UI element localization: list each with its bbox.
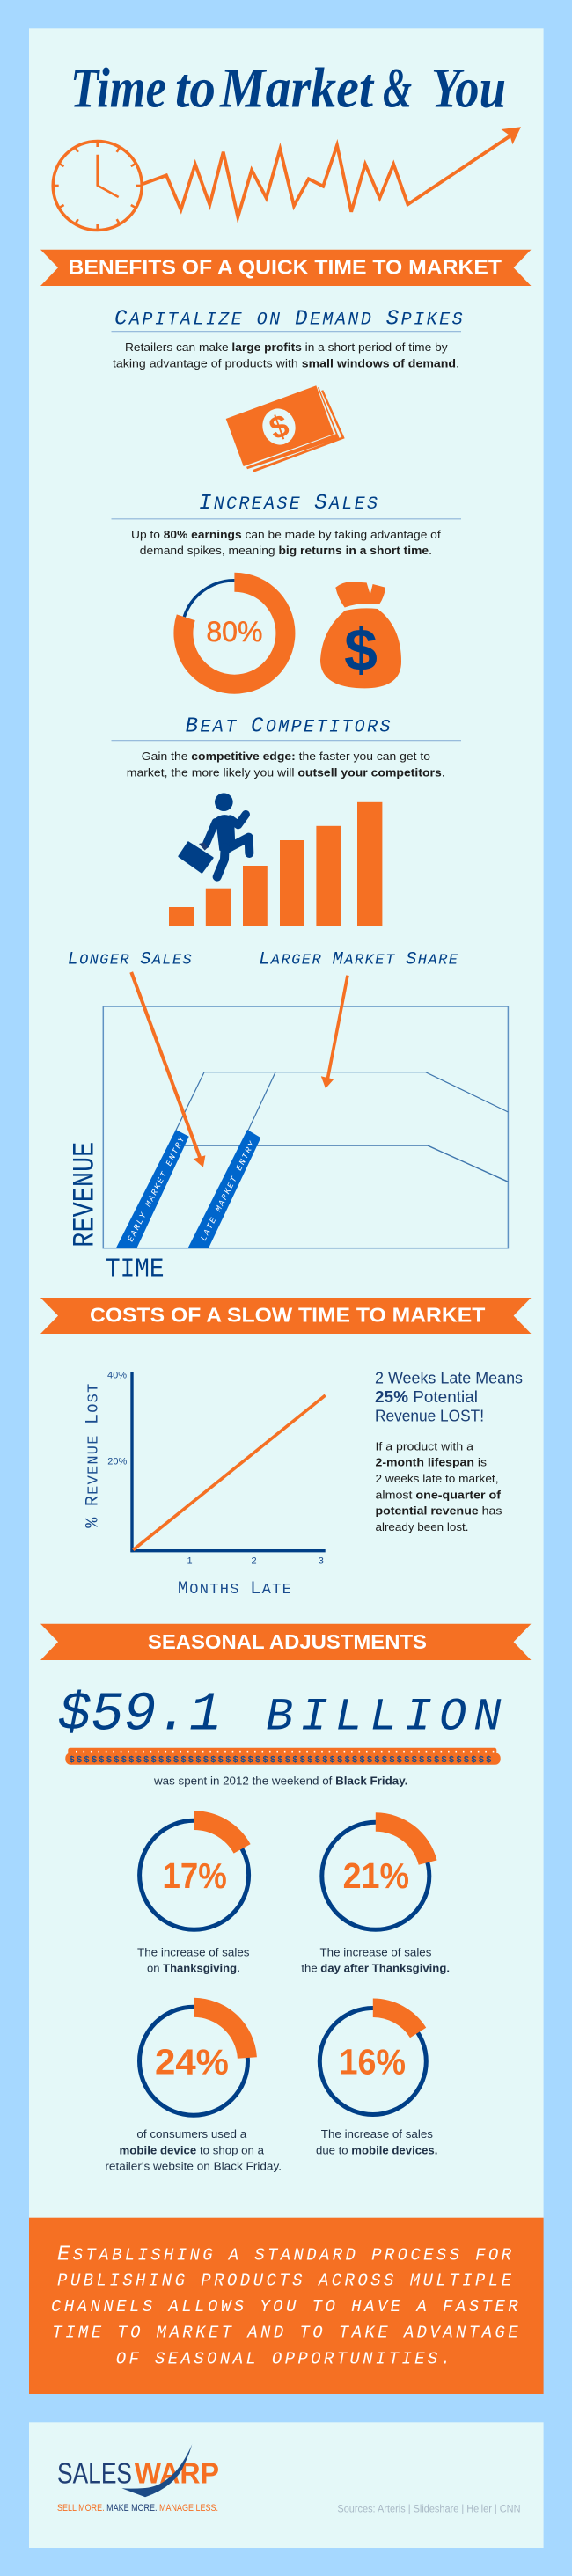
sources: Sources: Arteris | Slideshare | Heller | CNN bbox=[337, 2505, 521, 2515]
y axis label: % REVENUE LOST bbox=[84, 1384, 104, 1528]
axis label: revenue: REVENUE bbox=[70, 1142, 103, 1248]
callout body bbox=[375, 1439, 502, 1533]
banner: seasonal adjustments bbox=[40, 1624, 532, 1660]
caption: mobile device to shop on a bbox=[120, 2143, 265, 2156]
caption bbox=[137, 1945, 250, 1975]
caption bbox=[105, 2127, 282, 2173]
title: Time bbox=[70, 57, 166, 121]
caption: The increase of sales bbox=[137, 1945, 250, 1958]
icon: row of money bags bbox=[65, 1748, 501, 1765]
stat: 16%: 16% bbox=[340, 2041, 406, 2082]
callout body: If a product with a bbox=[375, 1439, 474, 1453]
caption: The increase of sales bbox=[320, 1945, 432, 1958]
body text: taking advantage of products with small windows of demand . bbox=[113, 356, 459, 370]
logo: saleswarp: SALES bbox=[57, 2457, 132, 2490]
arrow: longer sales bbox=[131, 972, 205, 1167]
chart: 80% donut: 80% bbox=[206, 616, 262, 648]
banner: benefits: BENEFITS OF A QUICK TIME TO MARKET bbox=[69, 256, 502, 279]
icon: clock bbox=[53, 141, 142, 231]
caption: retailer's website on Black Friday. bbox=[105, 2160, 282, 2173]
callout body: 2-month lifespan is bbox=[375, 1456, 488, 1469]
logo: saleswarp: SELL MORE. MAKE MORE. MANAGE LESS. bbox=[57, 2503, 218, 2514]
caption bbox=[316, 2127, 437, 2156]
conclusion text: TIME TO MARKET AND TO TAKE ADVANTAGE bbox=[52, 2324, 518, 2343]
icon: row of money bags: $$$$$$$$$$$$$$$$$$$$$$$$$$$$$$$$$$$$$$$$$$$$$$$$$$$$$$$$$ bbox=[70, 1754, 494, 1765]
x axis label: MONTHS LATE bbox=[178, 1579, 291, 1599]
body text bbox=[113, 340, 459, 370]
conclusion text: OF SEASONAL OPPORTUNITIES. bbox=[116, 2350, 451, 2369]
title bbox=[70, 57, 506, 121]
section: capitalize on demand spikes bbox=[111, 307, 463, 370]
callout heading bbox=[375, 1369, 523, 1425]
banner: costs bbox=[40, 1298, 532, 1334]
callout heading: 25% Potential bbox=[375, 1387, 478, 1406]
body text bbox=[131, 528, 441, 557]
chart: percent revenue lost by months late bbox=[84, 1371, 326, 1599]
heading: BEAT COMPETITORS bbox=[186, 714, 391, 739]
arrow: volatile line rising to the right bbox=[143, 127, 521, 217]
caption bbox=[301, 1945, 450, 1975]
body text: Up to 80% earnings can be made by taking advantage of bbox=[131, 528, 441, 541]
conclusion text bbox=[51, 2243, 518, 2369]
caption: The increase of sales bbox=[321, 2127, 433, 2141]
caption: the day after Thanksgiving. bbox=[301, 1962, 450, 1975]
panel: footer bbox=[29, 2422, 544, 2548]
heading: CAPITALIZE ON DEMAND SPIKES bbox=[114, 307, 463, 331]
icon: money bag: $ bbox=[344, 617, 378, 684]
x ticks: 1 bbox=[187, 1555, 193, 1566]
conclusion text: ESTABLISHING A STANDARD PROCESS FOR bbox=[57, 2243, 512, 2266]
big number: $59.1 billion: $59.1 bbox=[58, 1683, 222, 1745]
callout body: almost one-quarter of bbox=[375, 1488, 502, 1501]
body text: Gain the competitive edge: the faster you can get to bbox=[142, 750, 430, 763]
stat: 21% bbox=[301, 1812, 450, 1975]
y ticks: 20% bbox=[107, 1456, 128, 1467]
body text: demand spikes, meaning big returns in a short time . bbox=[140, 544, 432, 557]
band: early market entry: EARLY MARKET ENTRY bbox=[126, 1134, 187, 1243]
body text bbox=[127, 750, 445, 779]
body text: Retailers can make large profits in a short period of time by bbox=[125, 340, 448, 354]
icon: stack of money: $ bbox=[265, 406, 293, 447]
title: & bbox=[383, 57, 412, 121]
icon: money bag bbox=[320, 582, 401, 688]
section: increase sales bbox=[111, 492, 461, 557]
icon: businessman climbing bbox=[179, 793, 249, 877]
chart: revenue over time bbox=[68, 950, 508, 1285]
logo: saleswarp bbox=[57, 2444, 219, 2514]
conclusion text: CHANNELS ALLOWS YOU TO HAVE A FASTER bbox=[51, 2297, 518, 2316]
x ticks: 2 bbox=[251, 1555, 257, 1566]
chart: 80% donut bbox=[173, 573, 295, 694]
banner: benefits bbox=[40, 250, 532, 286]
title: You bbox=[431, 57, 506, 121]
title: to bbox=[175, 57, 216, 121]
late entry curve bbox=[184, 1072, 508, 1182]
caption: of consumers used a bbox=[136, 2127, 247, 2141]
band: late market entry bbox=[188, 1130, 260, 1248]
callout body: potential revenue has bbox=[375, 1504, 502, 1518]
text: black friday spend: was spent in 2012 the weekend of Black Friday. bbox=[153, 1774, 407, 1787]
stat: 21%: 21% bbox=[343, 1855, 409, 1896]
banner: costs: COSTS OF A SLOW TIME TO MARKET bbox=[90, 1304, 485, 1327]
icon: stack of money bbox=[226, 385, 345, 472]
stat: 17%: 17% bbox=[162, 1855, 227, 1896]
stat: 24%: 24% bbox=[155, 2041, 229, 2082]
big number: $59.1 billion: BILLION bbox=[266, 1691, 509, 1743]
callout body: 2 weeks late to market, bbox=[375, 1472, 498, 1485]
callout: 2 weeks late bbox=[375, 1369, 523, 1533]
callout heading: Revenue LOST! bbox=[375, 1407, 484, 1425]
banner: seasonal adjustments: SEASONAL ADJUSTMENTS bbox=[148, 1630, 427, 1653]
caption: due to mobile devices. bbox=[316, 2143, 437, 2156]
panel: orange conclusion bbox=[29, 2218, 544, 2394]
x ticks: 3 bbox=[319, 1555, 324, 1566]
body text: market, the more likely you will outsell your competitors . bbox=[127, 765, 445, 779]
early entry curve bbox=[176, 1072, 508, 1131]
label: longer sales: LONGER SALES bbox=[68, 950, 192, 970]
caption: on Thanksgiving. bbox=[147, 1962, 240, 1975]
callout heading: 2 Weeks Late Means bbox=[375, 1369, 523, 1387]
x ticks bbox=[187, 1555, 324, 1566]
y ticks: 40% bbox=[107, 1371, 127, 1381]
stat: 17% bbox=[137, 1811, 251, 1975]
callout body: already been lost. bbox=[375, 1520, 468, 1533]
band: late market entry: LATE MARKET ENTRY bbox=[199, 1139, 258, 1242]
stat: 24% bbox=[105, 1998, 282, 2173]
y ticks bbox=[107, 1371, 128, 1467]
logo: saleswarp: WARP bbox=[135, 2457, 219, 2490]
label: larger market share: LARGER MARKET SHARE bbox=[259, 950, 458, 970]
bar chart: rising steps bbox=[169, 802, 382, 926]
title: Market bbox=[219, 57, 375, 121]
panel: main content background bbox=[29, 28, 544, 2218]
big number: $59.1 billion bbox=[58, 1683, 509, 1745]
axis label: time: TIME bbox=[106, 1255, 164, 1285]
arrow: larger market share bbox=[321, 976, 348, 1088]
conclusion text: PUBLISHING PRODUCTS ACROSS MULTIPLE bbox=[57, 2271, 512, 2290]
section: beat competitors bbox=[111, 714, 461, 779]
stat: 16% bbox=[316, 1999, 437, 2156]
heading: INCREASE SALES bbox=[199, 492, 378, 516]
